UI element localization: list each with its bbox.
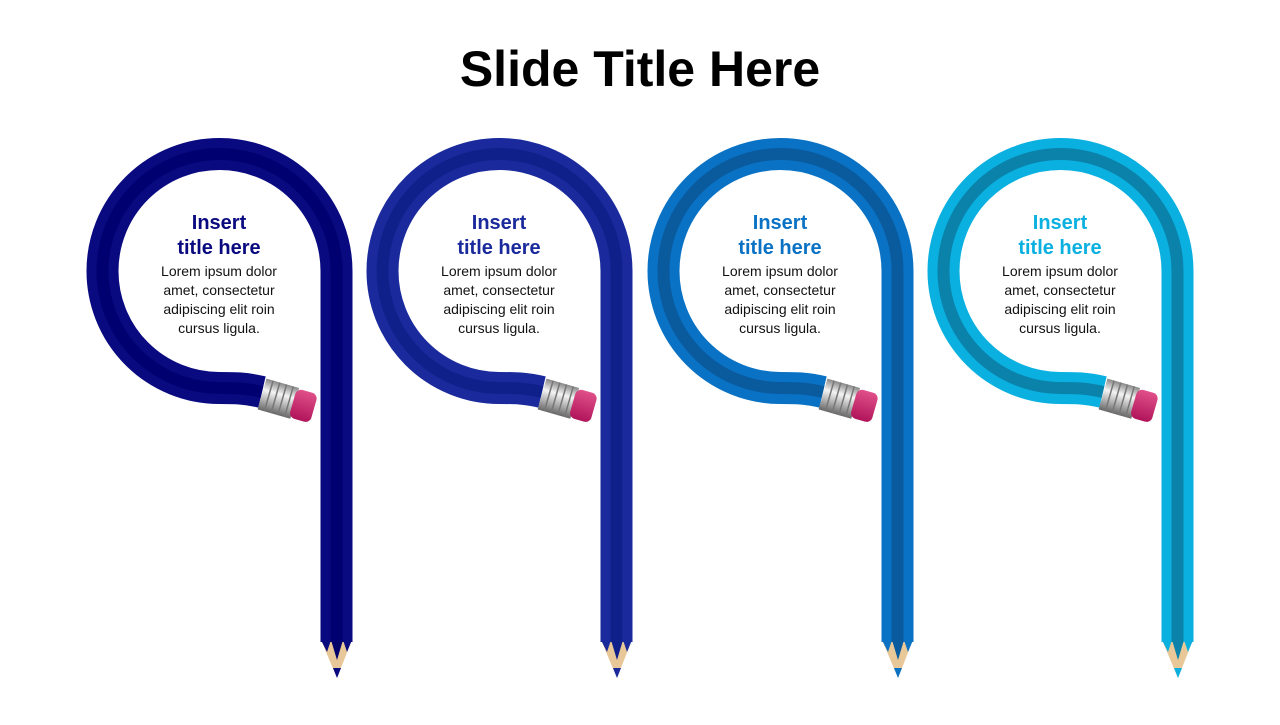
pencil 3 [664, 154, 913, 678]
text 1: Insert [192, 212, 247, 234]
text 4: amet, consectetur [1004, 282, 1116, 298]
text 3: amet, consectetur [724, 282, 836, 298]
text 4: adipiscing elit roin [1004, 301, 1116, 317]
text 1 [161, 212, 277, 336]
text 3: adipiscing elit roin [724, 301, 836, 317]
pencil 2 tip [601, 640, 632, 678]
pencil 3 tip [882, 640, 913, 678]
pencil 1 [103, 154, 352, 678]
text 4 [1002, 212, 1118, 336]
text 2: Insert [472, 212, 527, 234]
text 3: Lorem ipsum dolor [722, 263, 838, 279]
text 4: title here [1018, 237, 1102, 259]
text 3: Insert [753, 212, 808, 234]
eraser 4 [1099, 379, 1159, 424]
text 1: cursus ligula. [178, 320, 260, 336]
eraser 3 [819, 379, 879, 424]
text 2: title here [457, 237, 541, 259]
text 2: adipiscing elit roin [443, 301, 555, 317]
pencil 4 [944, 154, 1193, 678]
pencil 2 [382, 154, 632, 678]
text 2: Lorem ipsum dolor [441, 263, 557, 279]
pencil 4 tip [1162, 640, 1193, 678]
text 1: title here [177, 237, 261, 259]
pencil 1 tip [321, 640, 352, 678]
text 2: amet, consectetur [443, 282, 555, 298]
text 2: cursus ligula. [458, 320, 540, 336]
text 4: Insert [1033, 212, 1088, 234]
text 3: cursus ligula. [739, 320, 821, 336]
text 2 [441, 212, 557, 336]
text 4: Lorem ipsum dolor [1002, 263, 1118, 279]
text 3: title here [738, 237, 822, 259]
text 3 [722, 212, 838, 336]
title: Slide Title Here [460, 41, 820, 97]
text 4: cursus ligula. [1019, 320, 1101, 336]
text 1: amet, consectetur [163, 282, 275, 298]
eraser 1 [258, 379, 318, 424]
text 1: adipiscing elit roin [163, 301, 275, 317]
text 1: Lorem ipsum dolor [161, 263, 277, 279]
eraser 2 [538, 379, 598, 424]
